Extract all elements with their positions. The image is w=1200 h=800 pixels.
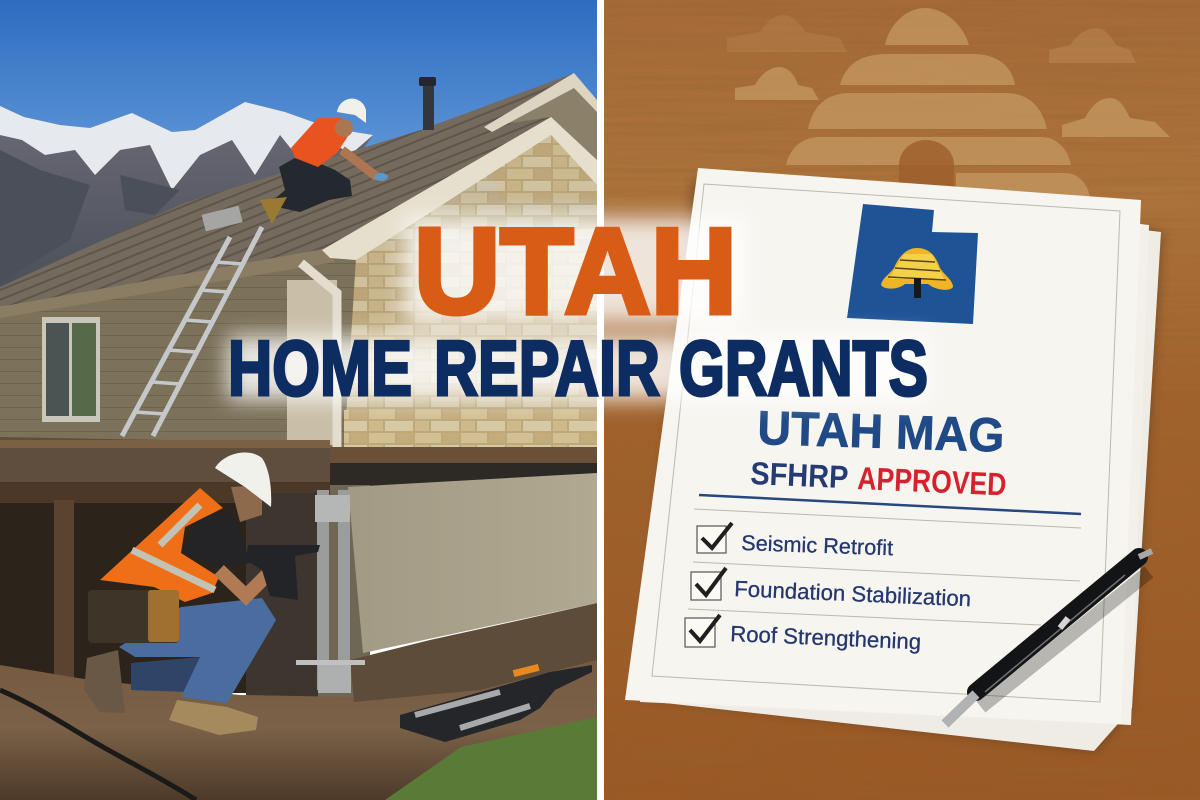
title: UTAH: UTAH xyxy=(414,203,737,339)
wood post xyxy=(54,500,74,680)
ladder stabilizer box xyxy=(202,206,243,231)
beehive watermark xyxy=(727,8,1170,197)
roof fascia xyxy=(0,248,335,318)
stone band xyxy=(344,410,597,448)
steel bracket xyxy=(296,490,365,693)
block wall behind worker xyxy=(246,493,318,698)
letter heading: UTAH MAG xyxy=(757,402,1005,463)
pen xyxy=(945,551,1152,724)
foundation wall xyxy=(348,473,597,653)
rock under knee xyxy=(84,650,125,713)
wall fill behind bracket xyxy=(318,485,370,697)
snowy mountains xyxy=(0,102,373,295)
rear gable trim xyxy=(484,73,597,132)
Utah state flag icon xyxy=(847,204,978,324)
wood grain xyxy=(604,78,1196,220)
item: foundation stabilization: Foundation Stabilization xyxy=(734,576,972,611)
tools on ground xyxy=(400,664,592,742)
timber beam xyxy=(0,482,330,503)
title: HOME REPAIR GRANTS: GRANTS xyxy=(679,324,928,412)
title: HOME REPAIR GRANTS xyxy=(228,324,928,412)
chimney vent xyxy=(419,77,436,130)
paper stack xyxy=(638,174,1162,751)
house wall xyxy=(0,250,597,450)
roofer xyxy=(260,99,388,224)
upper rubble beam xyxy=(0,437,330,482)
ground xyxy=(0,660,597,800)
hive door xyxy=(899,140,954,186)
item: roof strengthening xyxy=(685,615,922,654)
item: seismic retrofit xyxy=(697,523,894,560)
stone gable front xyxy=(346,135,597,410)
panel: right wood desk xyxy=(604,0,1200,800)
cable xyxy=(0,690,196,800)
item: roof strengthening: Roof Strengthening xyxy=(730,621,922,654)
ladder xyxy=(122,227,262,436)
item: foundation stabilization xyxy=(691,568,972,611)
light corner pillar xyxy=(287,280,337,445)
divider rule xyxy=(699,495,1081,514)
sky xyxy=(0,0,597,250)
SFHRP approved line: APPROVED xyxy=(857,460,1007,502)
rubble pile xyxy=(350,603,597,702)
white glow behind title xyxy=(228,218,928,400)
SFHRP approved line: SFHRP xyxy=(750,455,849,495)
SFHRP approved line xyxy=(750,455,1007,502)
wood surface xyxy=(604,0,1200,800)
gable trim xyxy=(322,117,597,260)
approval letter xyxy=(625,168,1152,724)
item: seismic retrofit: Seismic Retrofit xyxy=(741,531,894,560)
title: HOME REPAIR GRANTS: HOME xyxy=(228,324,412,412)
checklist xyxy=(685,509,1081,654)
roof xyxy=(0,73,574,307)
panel: left photo of home repair xyxy=(0,0,597,800)
grass xyxy=(385,717,597,800)
crawlspace xyxy=(0,503,246,693)
kneeling worker xyxy=(84,453,320,735)
window xyxy=(42,317,100,422)
right sill beams xyxy=(330,447,597,463)
title: HOME REPAIR GRANTS: REPAIR xyxy=(434,324,660,412)
rear gable wall xyxy=(492,88,597,200)
downspout xyxy=(301,263,337,450)
